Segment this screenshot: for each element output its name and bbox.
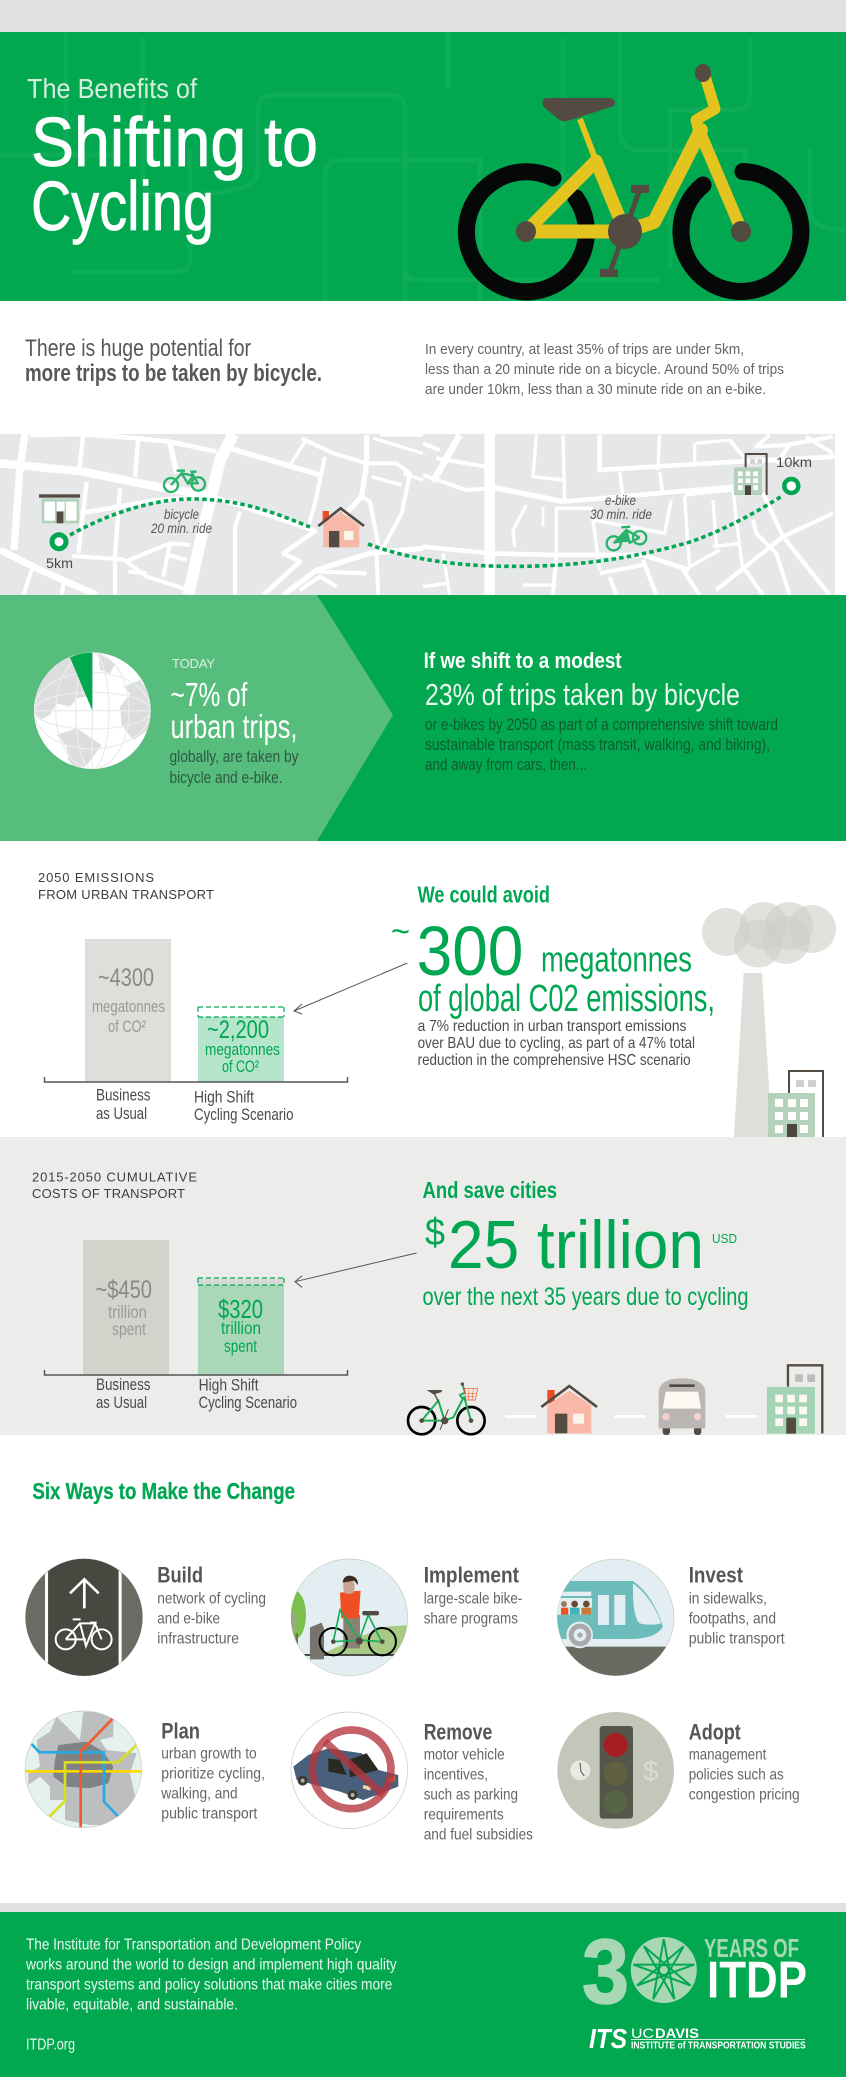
bar: business as usual cost: ~$450: [96, 1276, 152, 1304]
icon: no cars: [291, 1712, 408, 1829]
label: 10km: 10km: [776, 454, 812, 470]
axis labels: costs: Business: [96, 1376, 150, 1394]
text block: intro details: are under 10km, less than a 30 minute ride on an e-bike.: [425, 381, 766, 398]
text block: today: bicycle and e-bike.: [170, 768, 282, 787]
card: build: Build: [157, 1563, 203, 1588]
chart heading: costs: [32, 1170, 197, 1201]
label: bicycle 20 min ride: [150, 507, 212, 536]
title: The Benefits of: [27, 73, 197, 104]
card: build: and e-bike: [157, 1610, 220, 1627]
text block: intro details: less than a 20 minute ride on a bicycle. Around 50% of trips: [425, 361, 784, 378]
card: implement: [284, 1559, 522, 1676]
bar: business as usual cost: trillion: [108, 1302, 147, 1322]
card: plan: prioritize cycling,: [161, 1765, 265, 1782]
axis labels: emissions: as Usual: [96, 1105, 147, 1123]
text block: modest shift: sustainable transport (mass transit, walking, and biking),: [425, 735, 770, 754]
axis labels: costs: [96, 1376, 297, 1412]
text block: avoid emissions: of global C02 emissions,: [418, 978, 715, 1020]
icon: 10km marker: [784, 479, 798, 493]
title: Shifting to: [31, 103, 318, 181]
icon: 5km marker: [52, 535, 66, 549]
panel: emissions chart: [38, 870, 836, 1137]
text block: modest shift: and away from cars, then...: [425, 755, 587, 774]
axis labels: costs: as Usual: [96, 1394, 147, 1412]
heading: six ways: Six Ways to Make the Change: [32, 1478, 295, 1504]
text block: intro details: [425, 341, 784, 398]
icon: tram: [556, 1559, 676, 1677]
panel: header: [0, 32, 846, 301]
text block: today: globally, are taken by: [170, 747, 299, 766]
card: remove: Remove: [424, 1719, 492, 1744]
bar: business as usual cost: spent: [112, 1319, 146, 1339]
logo: ITS UC Davis: INSTITUTE of TRANSPORTATION STUDIES: [631, 2040, 806, 2051]
bar: business as usual cost: [83, 1240, 169, 1375]
card: implement: large-scale bike-: [424, 1590, 522, 1607]
icon: bus: [659, 1378, 705, 1435]
card: build: [25, 1557, 266, 1678]
text block: about ITDP: transport systems and policy solutions that make cities more: [26, 1976, 392, 1993]
text block: avoid emissions: over BAU due to cycling, as part of a 47% total: [418, 1035, 695, 1052]
icon: building: [767, 1365, 822, 1434]
icons: bike, house, bus, building row: [408, 1365, 822, 1435]
icon: house: [318, 508, 364, 547]
card: adopt: policies such as: [689, 1766, 784, 1783]
text block: avoid emissions: We could avoid: [418, 882, 550, 908]
card: build: network of cycling: [157, 1590, 266, 1607]
bar: high shift cycling: megatonnes: [205, 1040, 280, 1059]
chart heading: emissions: [38, 870, 214, 902]
card: adopt: management: [689, 1746, 767, 1763]
panel: shift band: [0, 595, 846, 841]
logo: 30 years of ITDP: [582, 1921, 807, 2023]
card: plan: Plan: [161, 1718, 200, 1743]
panel: footer: [0, 1912, 846, 2077]
bar: high shift cycling: [198, 1007, 284, 1082]
bar: business as usual: [85, 939, 171, 1082]
text block: save cities: 25 trillion: [448, 1207, 704, 1283]
panel: street map: [0, 434, 836, 595]
logo: ITS UC Davis: DAVIS: [655, 2025, 699, 2041]
text block: avoid emissions: [391, 882, 715, 1069]
icon: transit map: [25, 1711, 142, 1828]
chart heading: costs: COSTS OF TRANSPORT: [32, 1186, 185, 1201]
label: e-bike 30 min ride: 30 min. ride: [590, 507, 652, 522]
icon: bike lane: [25, 1557, 143, 1678]
icon: traffic light: $: [643, 1756, 659, 1787]
bar: business as usual: of CO²: [108, 1017, 146, 1036]
logo: ITS UC Davis: [589, 2023, 806, 2054]
text block: modest shift: 23% of trips taken by bicycle: [425, 677, 740, 712]
text block: intro headline: [25, 335, 322, 387]
axis labels: emissions: Cycling Scenario: [194, 1106, 294, 1124]
card: plan: urban growth to: [161, 1745, 257, 1762]
label: bicycle 20 min ride: 20 min. ride: [150, 521, 212, 536]
card: remove: incentives,: [424, 1766, 488, 1783]
chart heading: emissions: 2050 EMISSIONS: [38, 870, 154, 885]
card: adopt: [557, 1712, 800, 1829]
icon: yellow bicycle: [466, 64, 801, 292]
card: remove: requirements: [424, 1806, 504, 1823]
icon: person with share bike: [284, 1559, 410, 1676]
text block: modest shift: [424, 648, 778, 774]
icon: bike with basket: [408, 1382, 485, 1434]
card: remove: motor vehicle: [424, 1746, 505, 1763]
footer grey band: [0, 1903, 846, 1912]
text block: save cities: USD: [712, 1231, 737, 1246]
icon: factory with smoke: [702, 902, 836, 1137]
card: adopt: congestion pricing: [689, 1786, 800, 1803]
title: Cycling: [31, 167, 214, 245]
text block: avoid emissions: 300: [417, 912, 523, 990]
logo: ITS UC Davis: ITS: [589, 2023, 627, 2054]
logo: 30 years of ITDP: ITDP: [707, 1952, 807, 2010]
text block: save cities: [422, 1177, 748, 1311]
bar: high shift cost: [198, 1278, 284, 1375]
label: e-bike 30 min ride: e-bike: [605, 493, 636, 508]
label: e-bike 30 min ride: [590, 493, 652, 522]
card: invest: Invest: [689, 1563, 744, 1588]
card: invest: footpaths, and: [689, 1610, 776, 1627]
card: implement: Implement: [424, 1563, 520, 1588]
axis labels: emissions: High Shift: [194, 1088, 254, 1106]
chart heading: emissions: FROM URBAN TRANSPORT: [38, 887, 214, 902]
text block: today: [170, 656, 299, 787]
bar: business as usual: megatonnes: [92, 997, 165, 1016]
text block: today: TODAY: [172, 656, 215, 671]
bar: high shift cost: trillion: [221, 1318, 261, 1338]
card: implement: share programs: [424, 1610, 518, 1627]
text block: avoid emissions: a 7% reduction in urban transport emissions: [418, 1018, 686, 1035]
text block: intro headline: more trips to be taken by bicycle.: [25, 360, 322, 387]
card: plan: public transport: [161, 1805, 258, 1822]
card: plan: walking, and: [160, 1785, 238, 1802]
text block: about ITDP: ITDP.org: [26, 2036, 75, 2053]
axis labels: costs: High Shift: [199, 1377, 259, 1395]
text block: about ITDP: livable, equitable, and sustainable.: [26, 1996, 238, 2013]
card: invest: in sidewalks,: [689, 1590, 767, 1607]
logo: 30 years of ITDP: YEARS OF: [704, 1933, 799, 1963]
icon: house: [541, 1386, 597, 1433]
text block: avoid emissions: megatonnes: [541, 938, 692, 980]
text block: today: ~7% of: [170, 676, 248, 713]
label: bicycle 20 min ride: bicycle: [164, 507, 199, 522]
card: adopt: Adopt: [689, 1719, 741, 1744]
text block: about ITDP: [25, 1936, 397, 2053]
top grey band: [0, 0, 846, 32]
icon: globe with 7% wedge: [32, 652, 153, 772]
bar: high shift cycling: of CO²: [222, 1057, 259, 1076]
text block: intro headline: There is huge potential for: [25, 335, 251, 362]
text block: about ITDP: works around the world to design and implement high quality: [25, 1956, 397, 1973]
text block: intro details: In every country, at least 35% of trips are under 5km,: [425, 341, 744, 358]
card: remove: such as parking: [424, 1786, 518, 1803]
text block: avoid emissions: ~: [391, 913, 410, 951]
logo: 30 years of ITDP: 3: [582, 1921, 629, 2023]
arrow: to cost reduction: [295, 1253, 417, 1287]
text block: save cities: over the next 35 years due to cycling: [422, 1283, 748, 1311]
text block: about ITDP: The Institute for Transportation and Development Policy: [26, 1936, 361, 1953]
icon: office building: [734, 454, 767, 495]
card: build: infrastructure: [157, 1630, 239, 1647]
axis labels: emissions: [96, 1087, 294, 1124]
bar: high shift cost: spent: [224, 1336, 257, 1356]
bar: high shift cycling: ~2,200: [207, 1016, 269, 1044]
card: invest: public transport: [689, 1630, 785, 1647]
icon: e-bike: [607, 527, 646, 550]
card: plan: [25, 1711, 265, 1828]
label: 5km: 5km: [46, 555, 73, 571]
axis labels: costs: Cycling Scenario: [199, 1394, 297, 1412]
panel: cost chart: [0, 1137, 846, 1435]
logo: ITS UC Davis: UC: [631, 2025, 654, 2041]
icon: traffic light: [557, 1712, 674, 1829]
card: invest: [556, 1559, 785, 1677]
card: remove: [291, 1712, 533, 1843]
text block: modest shift: If we shift to a modest: [424, 648, 622, 673]
chart heading: costs: 2015-2050 CUMULATIVE: [32, 1170, 197, 1185]
bar: high shift cost: $320: [218, 1294, 263, 1324]
arrow: to dashed reduction: [294, 963, 407, 1014]
text block: save cities: And save cities: [422, 1177, 557, 1203]
text block: avoid emissions: reduction in the comprehensive HSC scenario: [418, 1052, 691, 1069]
icon: green bicycle: [164, 471, 205, 492]
text block: save cities: $: [425, 1212, 445, 1254]
bar: business as usual: ~4300: [98, 964, 154, 992]
icon: shop: [39, 494, 80, 523]
text block: today: urban trips,: [170, 708, 298, 745]
card: remove: and fuel subsidies: [424, 1826, 533, 1843]
title: [27, 73, 318, 245]
axis labels: emissions: Business: [96, 1087, 150, 1105]
route: dotted line: [70, 496, 782, 566]
